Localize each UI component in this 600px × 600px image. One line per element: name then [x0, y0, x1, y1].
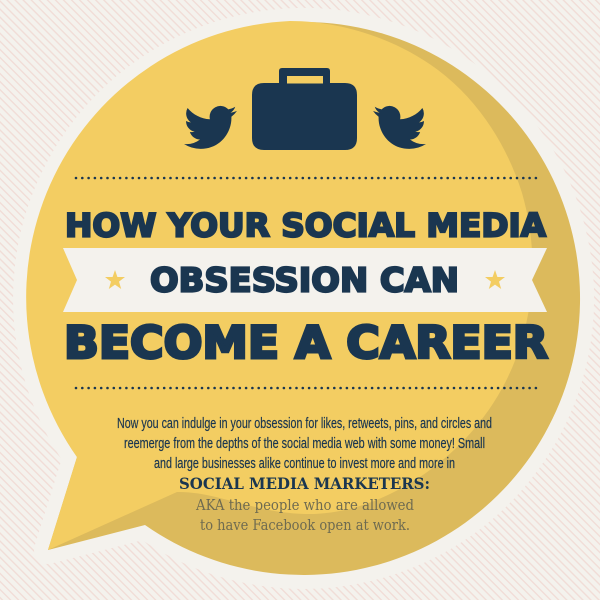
icon: left star [105, 270, 125, 289]
tagline [195, 496, 414, 534]
icon: right twitter bird [373, 106, 426, 149]
icon: right star [485, 270, 505, 289]
tagline: to have Facebook open at work. [200, 516, 410, 534]
intro paragraph [117, 415, 492, 472]
icon: left twitter bird [184, 106, 237, 149]
icon: briefcase [252, 68, 357, 150]
intro paragraph: and large businesses alike continue to invest more and more in [154, 455, 455, 472]
title line 3: BECOME A CAREER [64, 318, 548, 369]
ribbon banner [63, 248, 547, 312]
tagline: AKA the people who are allowed [195, 496, 414, 514]
title line 2: OBSESSION CAN [150, 260, 459, 300]
subheading: SOCIAL MEDIA MARKETERS: [179, 474, 430, 493]
title line 1: HOW YOUR SOCIAL MEDIA [65, 206, 546, 244]
